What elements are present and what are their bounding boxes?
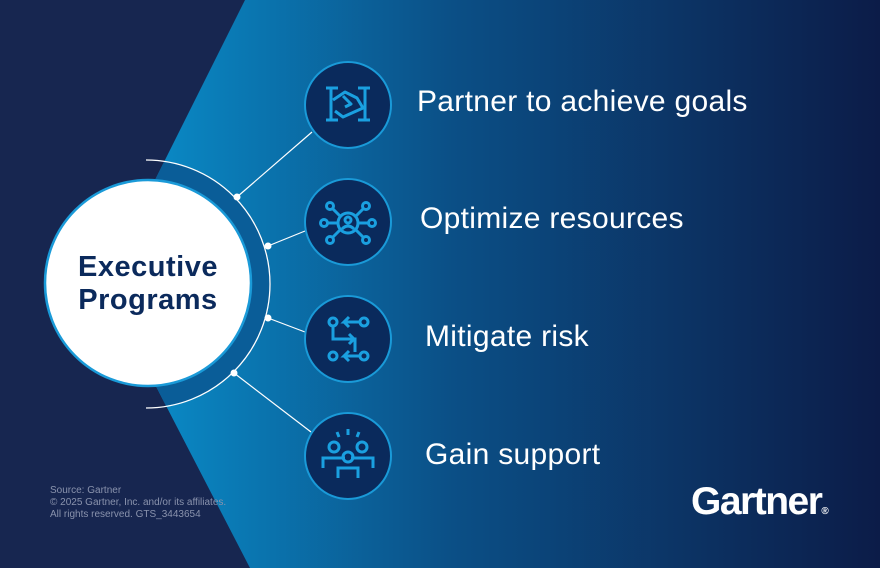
label 3: Mitigate risk bbox=[425, 320, 589, 353]
white arc bbox=[146, 160, 270, 408]
source note: © 2025 Gartner, Inc. and/or its affiliates. bbox=[50, 497, 226, 508]
title bbox=[78, 251, 218, 316]
title: Executive bbox=[78, 251, 218, 283]
main circle bbox=[45, 180, 251, 386]
icon: network person bbox=[320, 202, 376, 244]
label 2: Optimize resources bbox=[420, 202, 684, 235]
icon: support group bbox=[323, 429, 373, 478]
label 1: Partner to achieve goals bbox=[417, 85, 748, 118]
icon: handshake bbox=[326, 88, 370, 120]
title: Programs bbox=[78, 284, 218, 316]
source note: Source: Gartner bbox=[50, 485, 121, 496]
logo: Gartner® bbox=[691, 480, 827, 523]
ring band bbox=[156, 162, 271, 406]
label 4: Gain support bbox=[425, 438, 600, 471]
icon circles bbox=[305, 62, 391, 499]
source note: All rights reserved. GTS_3443654 bbox=[50, 509, 201, 520]
icon: risk arrows bbox=[329, 317, 368, 361]
connectors bbox=[234, 132, 312, 432]
source note bbox=[50, 485, 226, 520]
